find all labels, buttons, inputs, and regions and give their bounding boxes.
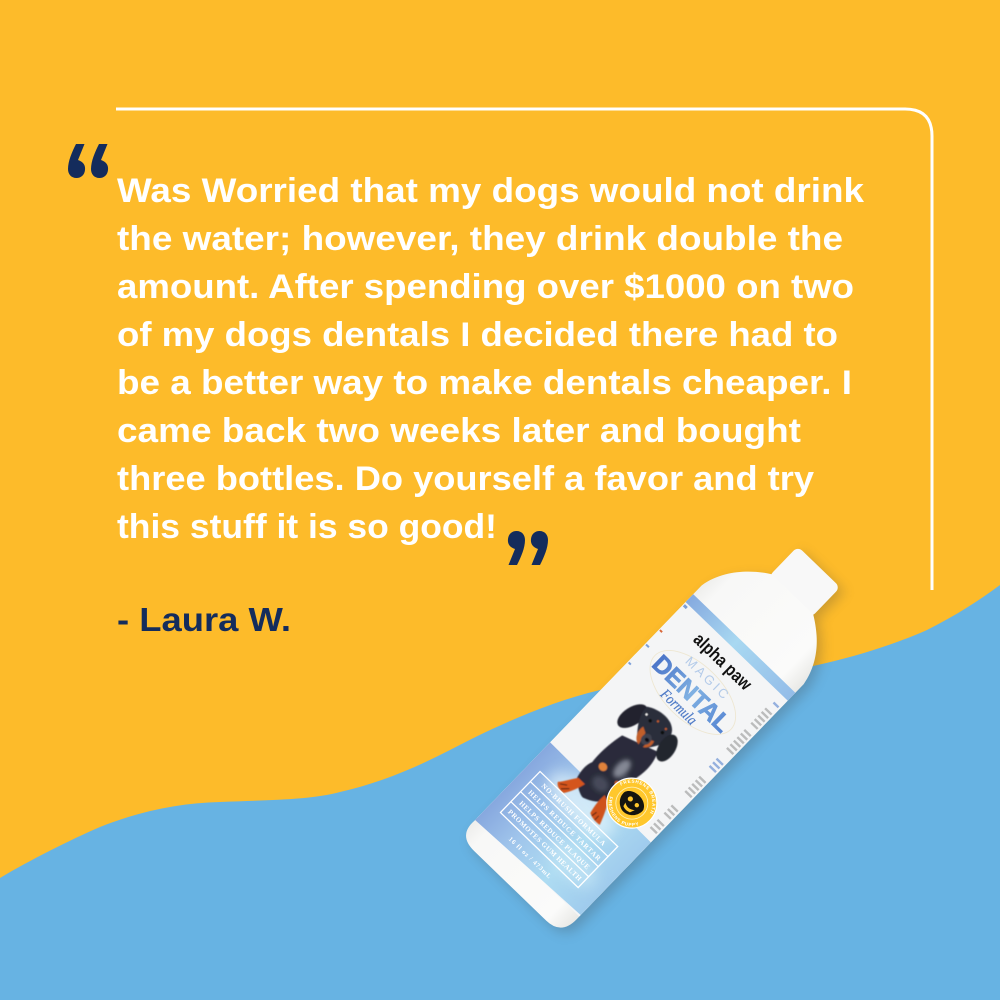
product bottle <box>466 548 838 928</box>
testimonial quote text: this stuff it is so good! <box>117 508 497 546</box>
dog fur highlights <box>589 751 639 801</box>
testimonial quote text: Was Worried that my dogs would not drink <box>117 172 864 210</box>
dog left ear <box>613 699 652 733</box>
testimonial quote text: be a better way to make dentals cheaper. I <box>117 364 852 402</box>
freshens breath badge <box>606 778 658 829</box>
dog body <box>569 723 661 816</box>
benefits box: PROMOTES GUM HEALTH <box>506 808 583 883</box>
left edge marks <box>628 604 688 666</box>
testimonial quote text: came back two weeks later and bought <box>117 412 801 450</box>
benefits box <box>500 771 618 888</box>
brand name: alpha paw <box>690 629 757 695</box>
product name: formula: Formula <box>656 686 700 729</box>
label lower blue band <box>474 742 653 919</box>
bottle shadow <box>464 522 875 940</box>
product name: dental: DENTAL <box>646 650 736 738</box>
icon: closing quotation mark <box>508 531 548 565</box>
dog muzzle <box>632 726 650 744</box>
dog illustration <box>551 691 690 831</box>
testimonial quote text: the water; however, they drink double the <box>117 220 843 258</box>
bottle cap <box>769 546 840 618</box>
benefits box: NO-BRUSH FORMULA <box>540 782 607 848</box>
attribution: - Laura W. <box>117 601 291 638</box>
benefits box: HELPS REDUCE PLAQUE <box>517 799 591 871</box>
benefits box: HELPS REDUCE TARTAR <box>526 789 603 863</box>
freshens breath badge: FRESHENS PUPPY <box>608 796 638 826</box>
dog left paw <box>555 770 585 800</box>
side ingredient text column <box>650 707 772 834</box>
testimonial quote text: of my dogs dentals I decided there had to <box>117 316 838 354</box>
dog right ear <box>652 731 682 765</box>
bottle body <box>459 544 843 935</box>
testimonial quote text: amount. After spending over $1000 on two <box>117 268 854 306</box>
dog chest spot <box>597 761 609 773</box>
dog head <box>624 702 678 756</box>
dog eyes <box>648 718 653 723</box>
bottle size: 16 fl oz / 473mL <box>507 836 553 881</box>
background: blue wave <box>0 585 1000 1000</box>
icon: opening quotation mark <box>68 144 108 178</box>
testimonial quote text <box>117 172 864 546</box>
testimonial frame line <box>116 109 932 590</box>
label decorative ellipse <box>635 635 750 749</box>
product name: magic: MAGIC <box>682 654 732 702</box>
freshens breath badge: FRESHENS BREATH <box>620 780 656 814</box>
label background <box>476 593 796 917</box>
dog right paw <box>587 795 617 825</box>
testimonial quote text: three bottles. Do yourself a favor and try <box>117 460 814 498</box>
label top band <box>685 593 796 701</box>
